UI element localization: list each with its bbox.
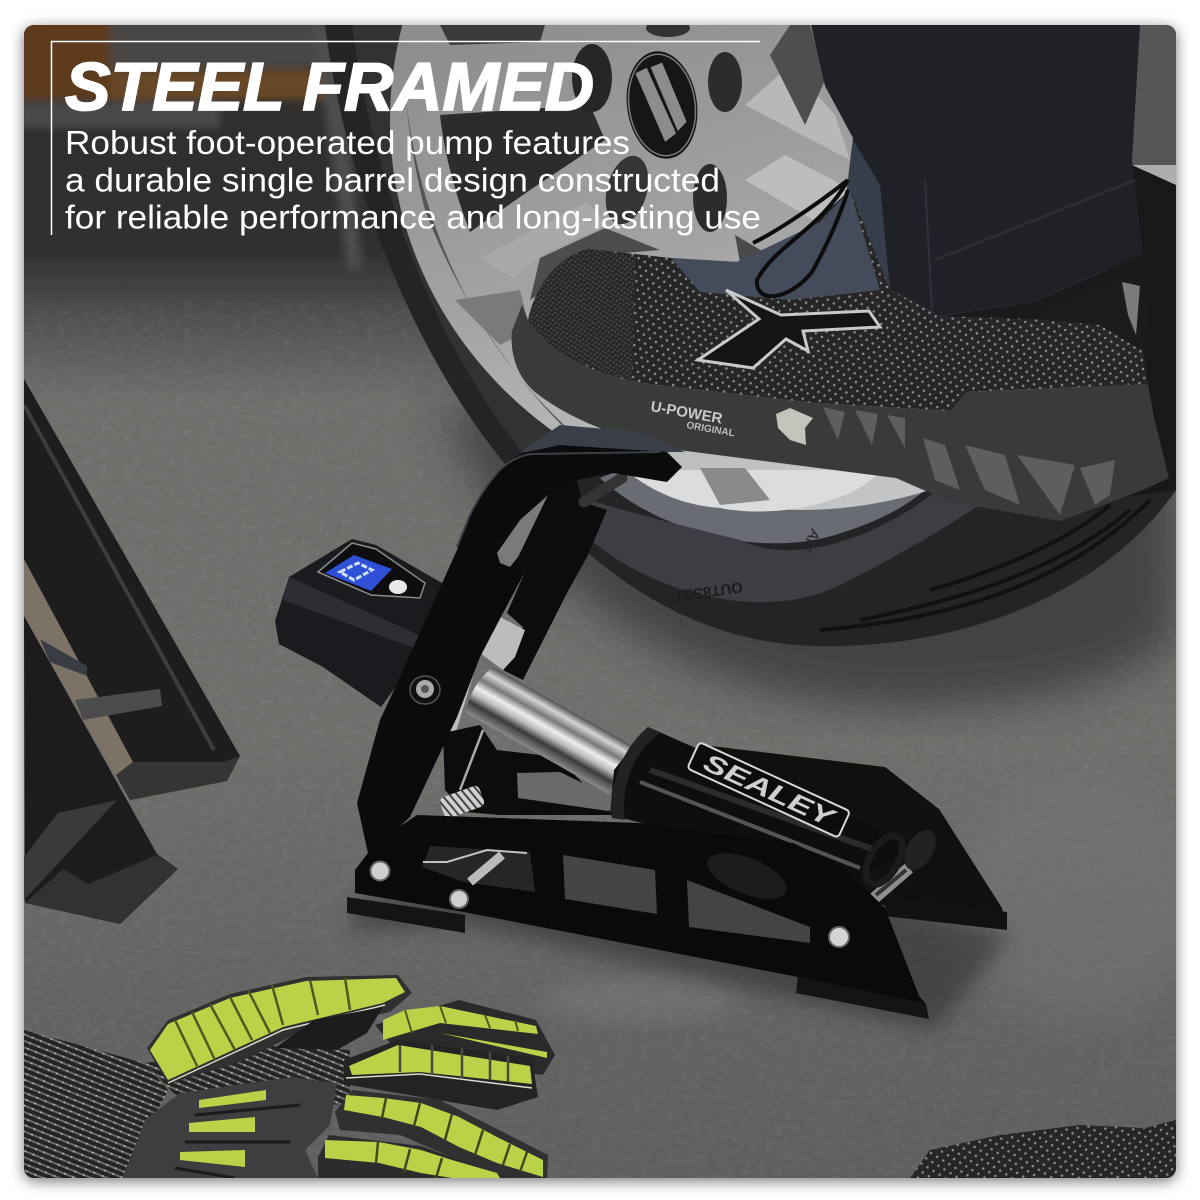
base bolt left	[370, 862, 390, 880]
lever slot	[497, 495, 548, 567]
gauge digits	[340, 563, 372, 580]
description text: a durable single barrel design constructed	[65, 162, 720, 198]
jeans leg	[811, 25, 1143, 316]
base bolt right	[829, 927, 849, 947]
rod wire	[460, 730, 483, 790]
car body right side	[1100, 25, 1176, 500]
background workshop top left	[20, 20, 362, 270]
toe cap	[528, 249, 635, 380]
base window one	[422, 846, 535, 892]
heel collar	[938, 270, 1108, 386]
gauge blue screen	[325, 555, 392, 591]
wheel centre cap	[626, 51, 698, 159]
pump shadow	[350, 880, 1010, 1030]
hose end fitting	[858, 824, 942, 901]
work gloves	[24, 975, 555, 1178]
lower linkage	[443, 725, 613, 815]
foot pump	[275, 425, 1007, 1019]
title: STEEL FRAMED	[65, 49, 594, 125]
glove cuff	[24, 1030, 168, 1178]
car tyre: AIC	[796, 526, 823, 556]
front foot	[347, 897, 465, 933]
sole brand subtext: ORIGINAL	[685, 420, 736, 439]
ladder stand legs	[24, 379, 240, 924]
shoe laces	[753, 180, 848, 296]
description text: for reliable performance and long-lasting use	[65, 198, 761, 236]
lion logo	[776, 408, 813, 445]
digital gauge housing	[275, 539, 442, 707]
rear support plate	[711, 746, 1003, 912]
black barrel	[610, 727, 905, 878]
second shoe bottom right	[910, 1120, 1176, 1178]
gauge button	[389, 580, 407, 594]
finger pad middle	[344, 1040, 538, 1110]
chrome cylinder	[466, 667, 633, 794]
shoe upper mesh	[528, 190, 1148, 411]
base window three	[687, 880, 810, 943]
base bolt centre	[450, 890, 468, 908]
base window two	[563, 855, 657, 914]
car tyre	[325, 25, 1176, 646]
rim barrel pockets	[440, 105, 605, 232]
right foot	[796, 977, 929, 1019]
car tyre: OUT8SST	[673, 578, 744, 605]
back finger	[375, 1000, 555, 1075]
sealey badge	[687, 742, 850, 838]
safety shoe	[512, 180, 1169, 521]
sealey badge: SEALEY	[699, 748, 841, 834]
description text	[65, 124, 761, 236]
thumb	[147, 975, 412, 1084]
glove knit back	[145, 1045, 350, 1105]
base frame	[355, 815, 926, 1004]
tyre tread above pedal	[520, 425, 685, 452]
return spring	[439, 784, 485, 820]
lever pivot bolt	[410, 676, 440, 704]
pedal link rod	[584, 478, 622, 502]
description text: Robust foot-operated pump features	[65, 124, 630, 161]
finger pad lower	[335, 1090, 548, 1178]
floor window under cylinder	[517, 772, 611, 811]
heel panel	[1036, 319, 1130, 343]
callout frame	[52, 42, 760, 235]
finger pad bottom	[318, 1135, 510, 1178]
sole lugs	[823, 407, 1115, 515]
rear pedal arm	[503, 480, 607, 680]
silver pivot block	[450, 618, 525, 732]
glove palm	[122, 1077, 337, 1178]
front pedal lever	[357, 445, 682, 853]
lever edge highlight	[457, 452, 660, 547]
rear foot	[885, 906, 1007, 930]
lower left spoke	[480, 202, 607, 278]
base embossed oval	[701, 844, 793, 908]
outsole	[512, 305, 1169, 521]
tire shadow on floor	[440, 400, 1176, 706]
brand swoosh logo	[698, 290, 880, 368]
gauge bezel	[318, 543, 425, 598]
tongue and lace panel	[671, 190, 880, 300]
sole brand text: U-POWER	[649, 398, 724, 428]
alloy wheel rim	[390, 0, 1200, 512]
